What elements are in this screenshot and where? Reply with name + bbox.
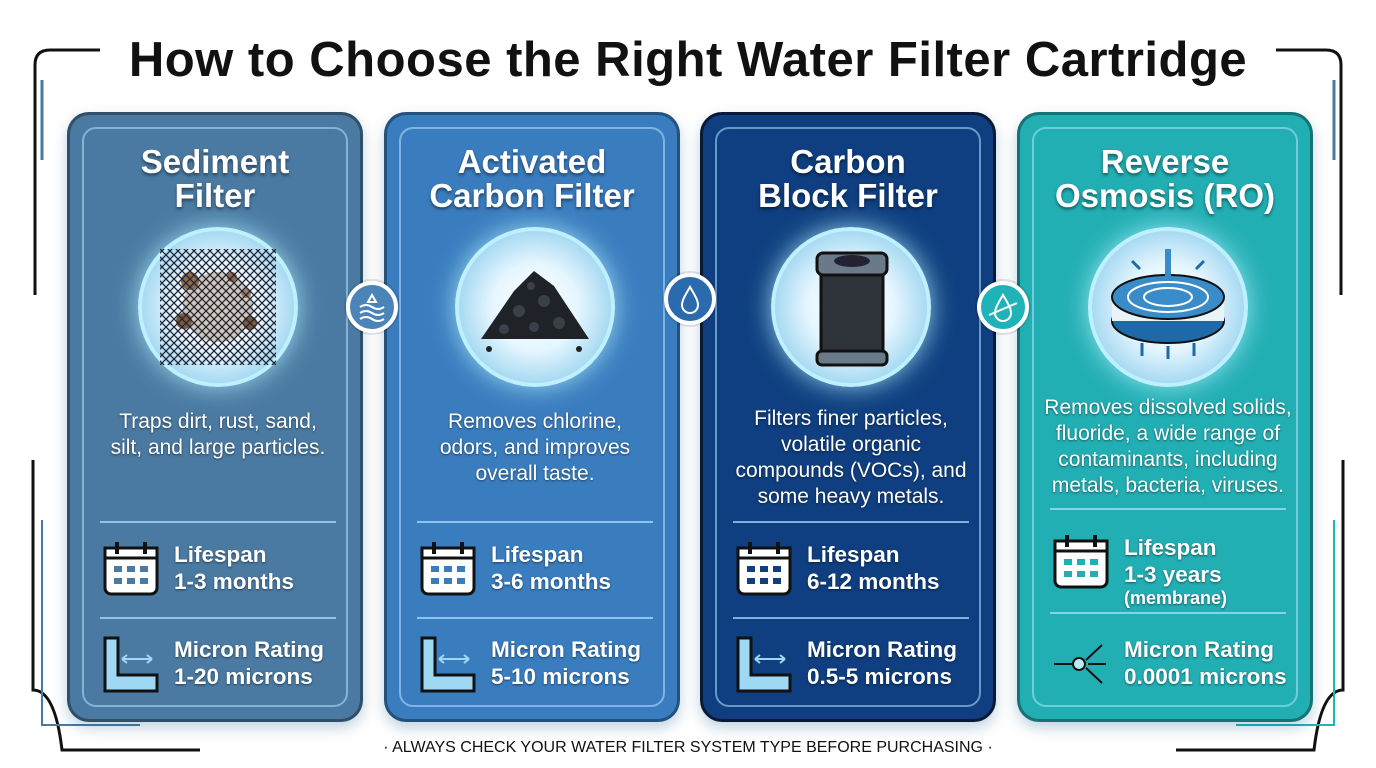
text: description — [110, 410, 325, 461]
connector icon 1 — [346, 281, 398, 333]
text: description: Removes dissolved solids, — [1044, 396, 1292, 419]
panel: carbon block — [700, 112, 996, 722]
icon: molecule — [1054, 644, 1106, 684]
text: description: silt, and large particles. — [111, 436, 325, 459]
text: micron: 0.5-5 microns — [807, 664, 952, 689]
icon: ruler — [736, 636, 792, 692]
heading: reverse osmosis: Osmosis (RO) — [1055, 177, 1275, 214]
icon: calendar — [420, 542, 476, 596]
text: lifespan: Lifespan — [807, 542, 900, 567]
heading: reverse osmosis: Reverse — [1101, 143, 1229, 180]
text: micron: Micron Rating — [1124, 637, 1274, 662]
text: lifespan: Lifespan — [1124, 535, 1217, 560]
text: lifespan — [174, 542, 294, 594]
text: description: metals, bacteria, viruses. — [1052, 474, 1284, 497]
icon: carbon pile — [455, 227, 615, 387]
text: description: contaminants, including — [1058, 448, 1278, 471]
panel: activated carbon — [384, 112, 680, 722]
icon: cartridge — [771, 227, 931, 387]
text: description — [1044, 396, 1292, 497]
heading: activated carbon — [428, 143, 636, 214]
text: lifespan — [1124, 535, 1228, 610]
icon: membrane — [1088, 227, 1248, 387]
text: description: Traps dirt, rust, sand, — [119, 410, 317, 433]
footer note: · ALWAYS CHECK YOUR WATER FILTER SYSTEM TYPE BEFORE PURCHASING · — [383, 739, 993, 756]
panel: reverse osmosis — [1017, 112, 1313, 722]
heading: carbon block: Carbon — [790, 143, 906, 180]
text: lifespan — [806, 542, 940, 594]
text: description: Filters finer particles, — [754, 407, 948, 430]
icon: calendar — [736, 542, 792, 596]
title: How to Choose the Right Water Filter Cartridge — [129, 33, 1247, 87]
text: description — [440, 410, 630, 485]
text: lifespan: Lifespan — [491, 542, 584, 567]
heading: carbon block: Block Filter — [758, 177, 938, 214]
text: lifespan: 3-6 months — [491, 569, 611, 594]
text: description: fluoride, a wide range of — [1056, 422, 1280, 445]
icon: ruler — [420, 636, 476, 692]
text: lifespan: 1-3 months — [174, 569, 294, 594]
text: micron: 0.0001 microns — [1124, 664, 1287, 689]
text: lifespan — [490, 542, 612, 594]
text: micron: Micron Rating — [807, 637, 957, 662]
connector icon 3 — [977, 281, 1029, 333]
heading: sediment — [140, 143, 290, 214]
heading: activated carbon: Carbon Filter — [429, 177, 635, 214]
icon: calendar — [1054, 535, 1108, 588]
heading: activated carbon: Activated — [458, 143, 606, 180]
text: description: volatile organic — [781, 433, 921, 456]
icon: mesh with dirt — [138, 227, 298, 387]
text: description: compounds (VOCs), and — [735, 459, 967, 482]
text: lifespan: 6-12 months — [807, 569, 940, 594]
text: micron: 5-10 microns — [491, 664, 630, 689]
text: micron — [174, 637, 324, 689]
heading: carbon block — [758, 143, 939, 214]
heading: sediment: Filter — [175, 177, 255, 214]
panel: sediment filter — [67, 112, 363, 722]
text: micron — [806, 637, 957, 689]
text: micron: Micron Rating — [174, 637, 324, 662]
text: description: odors, and improves — [440, 436, 630, 459]
text: micron — [1124, 637, 1287, 689]
text: description: Removes chlorine, — [448, 410, 622, 433]
text: lifespan: (membrane) — [1124, 588, 1227, 608]
text: lifespan: 1-3 years — [1124, 562, 1222, 587]
heading: reverse osmosis — [1054, 143, 1276, 218]
connector icon 2 — [664, 273, 716, 325]
text: micron: 1-20 microns — [174, 664, 313, 689]
text: description: some heavy metals. — [758, 485, 944, 508]
text: description: overall taste. — [475, 462, 595, 485]
text: micron: Micron Rating — [491, 637, 641, 662]
text: lifespan: Lifespan — [174, 542, 267, 567]
text: micron — [490, 637, 641, 689]
icon: ruler — [104, 636, 158, 692]
text: description — [735, 407, 967, 510]
heading: sediment: Sediment — [141, 143, 289, 180]
icon: calendar — [104, 542, 158, 596]
